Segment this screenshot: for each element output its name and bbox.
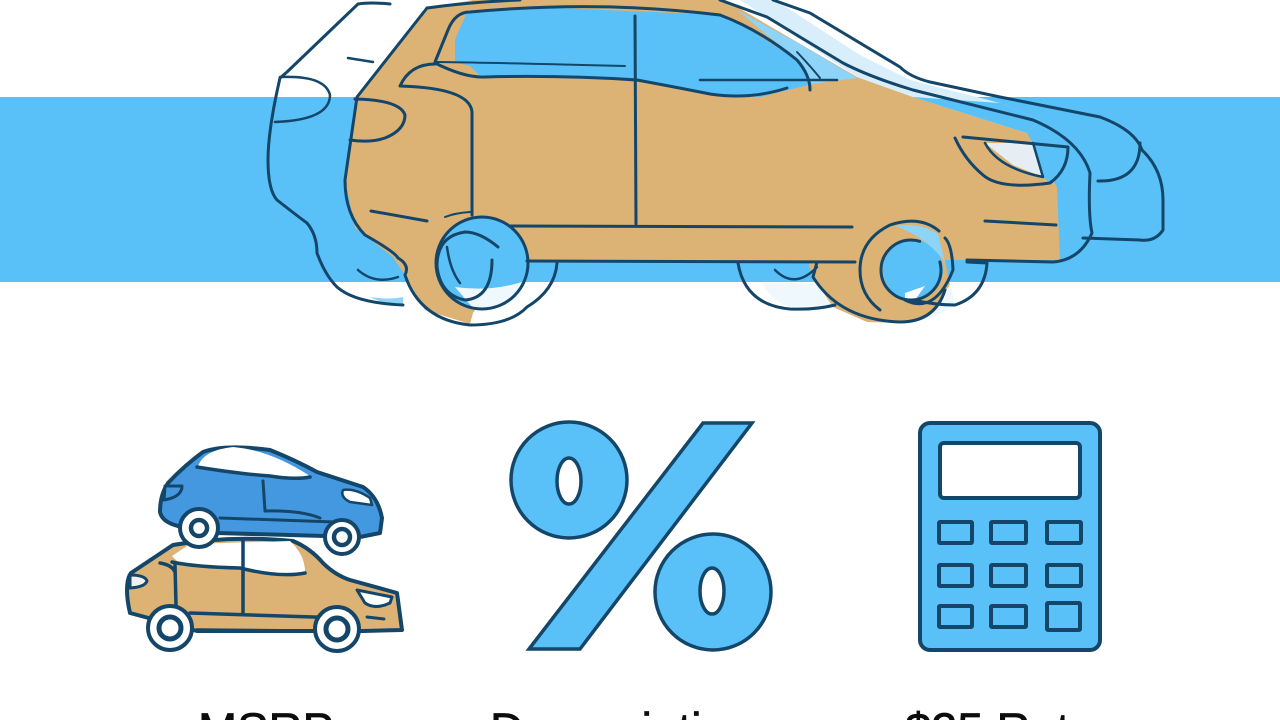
- icon: blue car: [160, 447, 382, 554]
- middle outline: [720, 0, 1092, 262]
- hood outer outline: [773, 0, 1163, 240]
- rear wheel outline: [860, 221, 939, 310]
- illustration: main car with motion outlines: [268, 0, 1163, 325]
- icon: tan car: [127, 539, 402, 651]
- front car body outline: [345, 8, 557, 325]
- pale wedge beyond windshield: [737, 10, 857, 84]
- rear ghost wheel arcs: [738, 263, 835, 309]
- windshield and side window: [455, 8, 812, 97]
- door and window lines: [435, 7, 810, 90]
- percent top circle: [511, 422, 627, 538]
- rear wheel hub: [883, 240, 943, 300]
- white highlight on front wheel: [455, 282, 522, 309]
- icon: calculator: [920, 423, 1100, 650]
- icon: stacked cars: [127, 447, 402, 651]
- hood reflection: [740, 0, 1040, 133]
- blue horizontal band: [0, 97, 1280, 282]
- pale reflection under rear ghost wheel: [762, 283, 834, 307]
- blue sliver under rear ghost bumper: [370, 297, 403, 305]
- blue strip between tan hood and middle outline: [913, 97, 1040, 133]
- outer ghost car outline: [268, 3, 403, 305]
- tan car body: [345, 0, 1060, 324]
- percent slash: [529, 423, 752, 649]
- front wheel hub: [437, 218, 527, 308]
- calculator screen: [940, 443, 1080, 498]
- calculator buttons: [939, 522, 1081, 630]
- icon: percent sign: [511, 422, 771, 650]
- rear wheel highlights: [905, 286, 925, 300]
- percent bottom circle: [655, 534, 771, 650]
- headlight glass: [985, 143, 1043, 177]
- headlight outline: [955, 137, 1068, 185]
- front wheel outline: [436, 217, 528, 309]
